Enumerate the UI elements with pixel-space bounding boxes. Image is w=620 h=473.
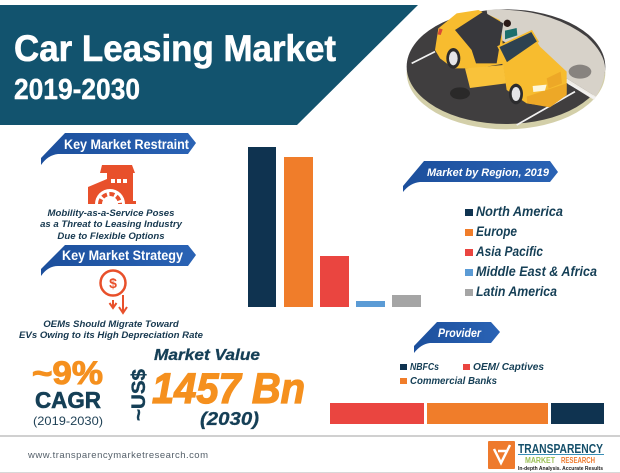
ribbon: Provider: Provider (438, 328, 481, 340)
ribbon: Provider (414, 322, 500, 353)
ribbon: Key Market Strategy (41, 245, 196, 276)
stat: CAGR: (2019-2030) (33, 414, 103, 428)
ribbon: Key Market Strategy: Key Market Strategy (62, 248, 183, 263)
ribbon: Market by Region (403, 161, 558, 192)
logo: Transparency Market Research: RESEARCH (561, 456, 595, 465)
ribbon: Market by Region: Market by Region, 2019 (427, 167, 550, 179)
text: strategy description: EVs Owing to its High Depreciation Rate (19, 330, 204, 341)
legend: providers (400, 362, 544, 387)
bar chart: market by region (248, 147, 421, 307)
legend: providers: OEM/ Captives (473, 362, 544, 373)
logo: Transparency Market Research: MARKET (525, 456, 555, 465)
title banner (0, 5, 418, 125)
stat: CAGR: CAGR (35, 387, 101, 413)
legend: regions: North America (476, 204, 563, 219)
text: restraint description (40, 208, 183, 242)
text: restraint description: Due to Flexible Options (57, 231, 165, 242)
title: Car Leasing Market (14, 28, 336, 69)
legend: providers: Commercial Banks (410, 376, 497, 387)
text: strategy description: OEMs Should Migrate Toward (43, 319, 180, 330)
icon: factory with gear (88, 165, 136, 204)
icon: dollar coin with down arrows: $ (109, 275, 117, 291)
text: restraint description: Mobility-as-a-Service Poses (48, 208, 174, 219)
stacked bar: provider share (330, 403, 604, 424)
title years: 2019-2030 (14, 74, 140, 106)
stat: market value: ~US$ (129, 369, 150, 421)
stat: CAGR (32, 355, 103, 428)
legend: regions: Asia Pacific (475, 244, 543, 259)
legend: regions: Latin America (476, 284, 557, 299)
icon: dollar coin with down arrows (100, 270, 127, 313)
text: restraint description: as a Threat to Leasing Industry (40, 219, 183, 230)
stat: market value (129, 347, 305, 429)
text: strategy description (19, 319, 204, 341)
ribbon: Key Market Restraint: Key Market Restraint (64, 137, 189, 152)
legend: providers: NBFCs (410, 362, 439, 373)
legend: regions: Europe (476, 224, 517, 239)
legend: regions (465, 204, 597, 299)
stat: market value: Market Value (154, 347, 260, 364)
stat: market value: (2030) (200, 409, 259, 429)
footer url: www.transparencymarketresearch.com (27, 450, 208, 461)
stat: market value: 1457 Bn (152, 365, 305, 413)
logo: Transparency Market Research (488, 441, 604, 472)
legend: regions: Middle East & Africa (476, 264, 597, 279)
illustration: yellow car in parking spot (407, 9, 605, 129)
ribbon: Key Market Restraint (41, 133, 196, 165)
stat: CAGR: ~9% (32, 355, 103, 391)
logo: Transparency Market Research: In-depth Analysis. Accurate Results (518, 466, 603, 472)
